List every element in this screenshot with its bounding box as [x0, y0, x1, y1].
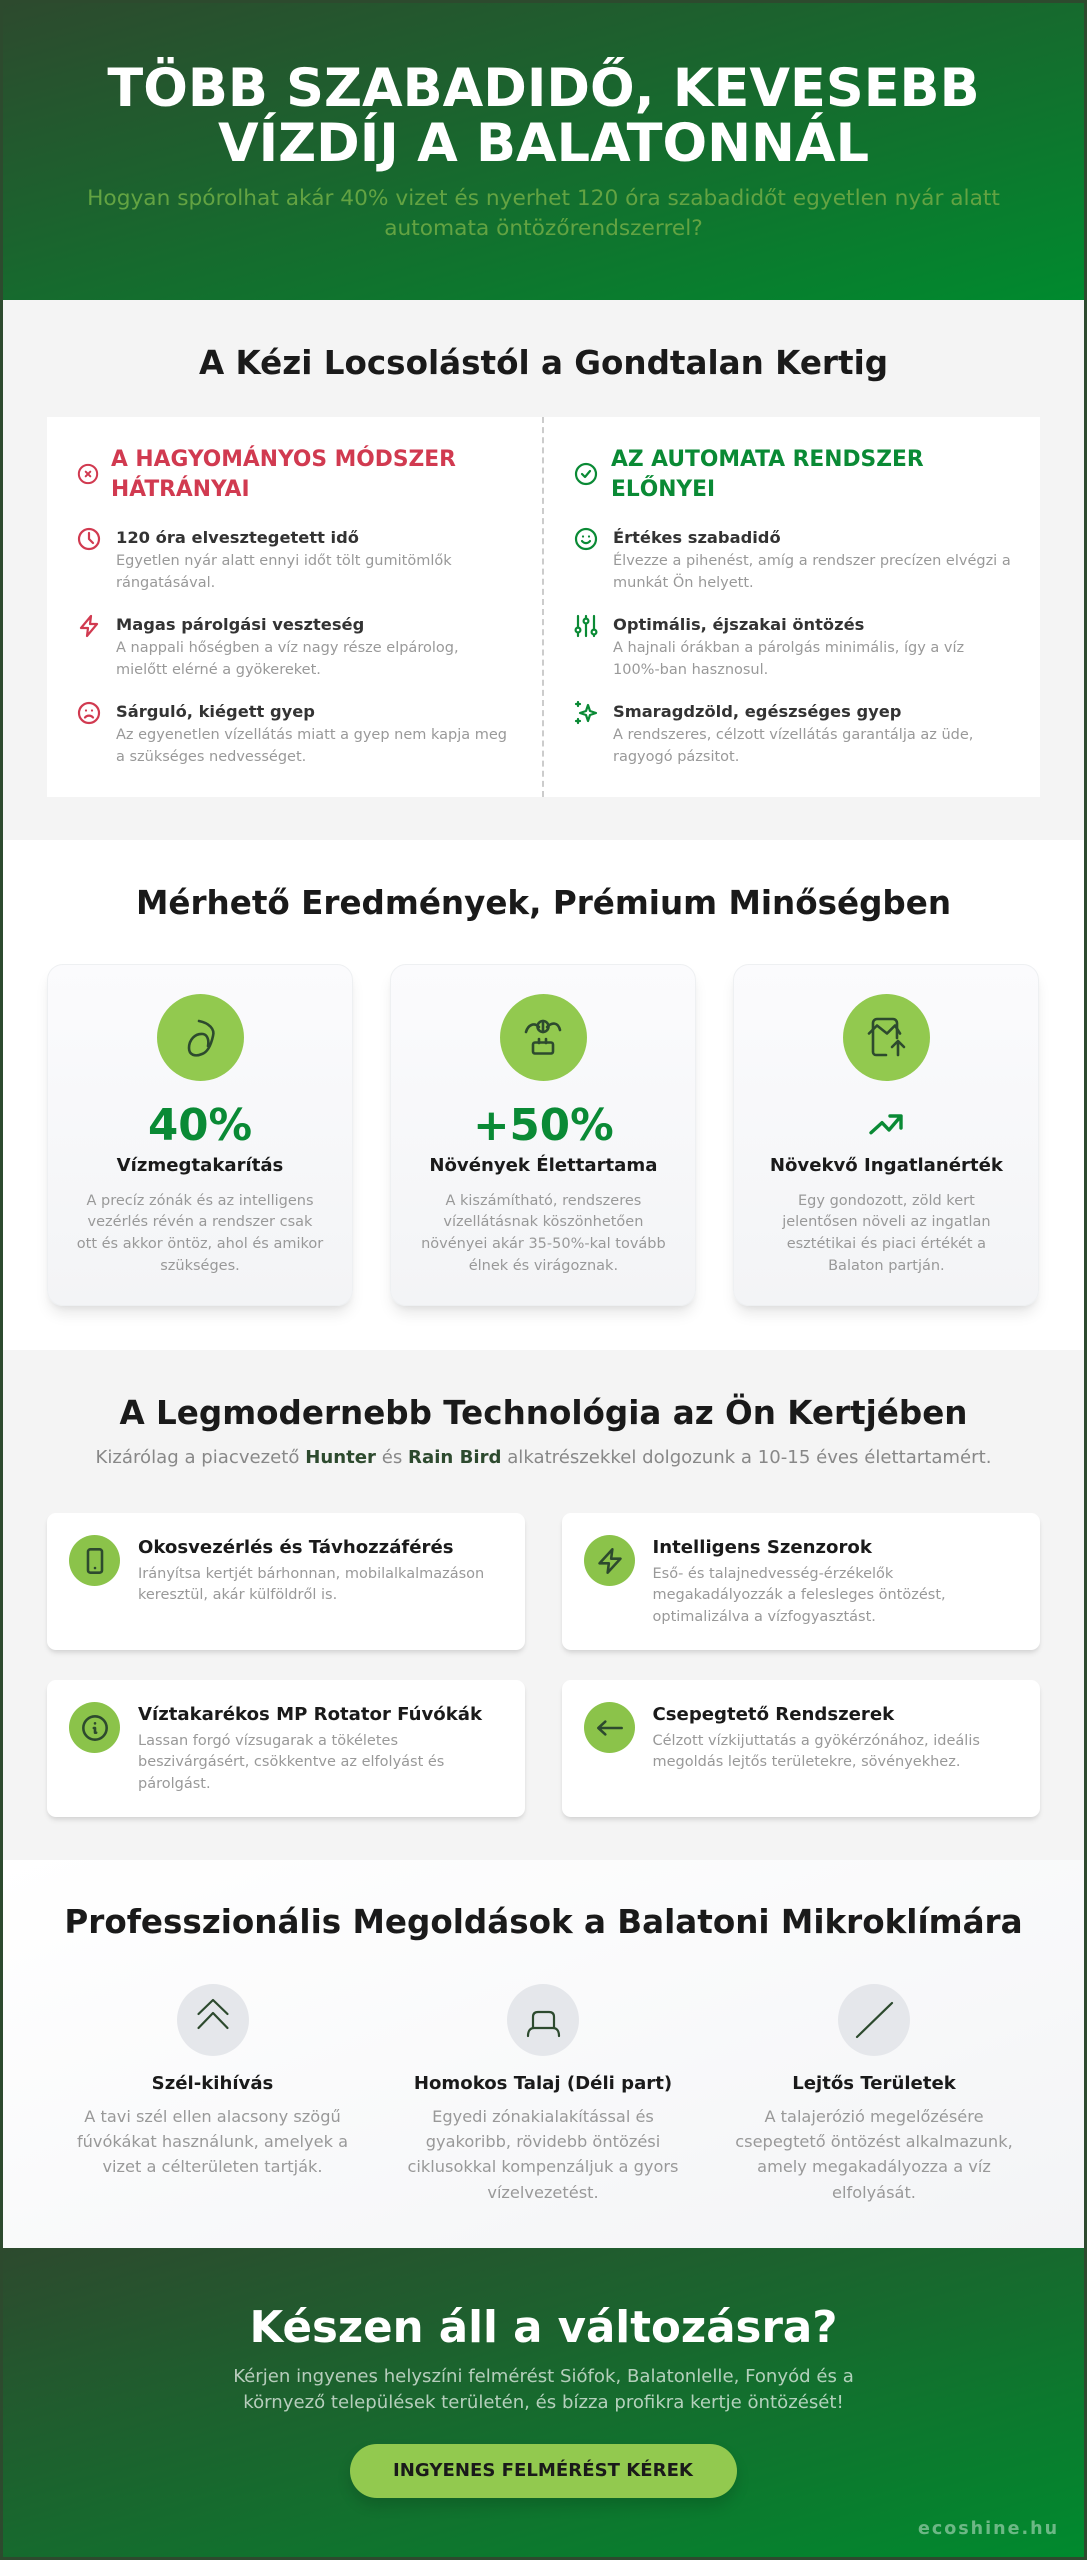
- column text: A talajerózió megelőzésére: [764, 2107, 984, 2126]
- heading: benefits: ELŐNYEI: [611, 476, 715, 502]
- section: local solutions: [3, 1860, 1084, 2248]
- item text: [613, 552, 1011, 591]
- intro text: Kizárólag a piacvezető Hunter és Rain Bird alkatrészekkel dolgozunk a 10-15 éves élettartamért.: [96, 1446, 991, 1468]
- divider: [542, 417, 544, 797]
- item title: Sárguló, kiégett gyep: [116, 702, 315, 721]
- card title: Vízmegtakarítás: [117, 1155, 283, 1176]
- column text: gyakoribb, rövidebb öntözési: [426, 2132, 660, 2151]
- column text: amely megakadályozza a víz: [757, 2157, 991, 2176]
- column title: Lejtős Területek: [792, 2072, 956, 2094]
- card text: megoldás lejtős területekre, sövényekhez.: [652, 1754, 960, 1770]
- card title: Víztakarékos MP Rotator Fúvókák: [138, 1704, 482, 1725]
- column title: Homokos Talaj (Déli part): [414, 2072, 672, 2094]
- icon: x circle: [78, 464, 98, 484]
- card title: Okosvezérlés és Távhozzáférés: [138, 1537, 454, 1558]
- card text: vízellátásnak köszönhetően: [443, 1214, 643, 1230]
- item: yellow lawn: [78, 702, 507, 765]
- card text: A precíz zónák és az intelligens: [86, 1192, 314, 1208]
- button: [350, 2444, 736, 2498]
- card title: Csepegtető Rendszerek: [652, 1704, 894, 1725]
- card text: vezérlés révén a rendszer csak: [88, 1214, 312, 1230]
- heading: drawbacks: [111, 445, 456, 502]
- item text: [613, 640, 964, 678]
- card text: Eső- és talajnedvesség-érzékelők: [652, 1566, 893, 1582]
- card: smart control: [47, 1513, 525, 1650]
- icon circle: phone: [69, 1535, 120, 1586]
- section: comparison: [3, 300, 1084, 840]
- column: slopes: [735, 1984, 1013, 2202]
- card: drip systems: [562, 1680, 1040, 1817]
- icon circle: info: [69, 1702, 120, 1753]
- item text: [613, 727, 973, 765]
- card text: optimalizálva a vízfogyasztást.: [652, 1609, 876, 1625]
- section: results: [3, 840, 1084, 1350]
- section: call to action: [3, 2248, 1084, 2557]
- card text: [652, 1566, 946, 1625]
- brand mark: ecoshine.hu: [918, 2519, 1059, 2539]
- card text: [77, 1192, 324, 1274]
- button: INGYENES FELMÉRÉST KÉREK: [393, 2460, 693, 2481]
- column text: csepegtető öntözést alkalmazunk,: [735, 2132, 1013, 2151]
- item: evaporation: [80, 614, 459, 678]
- card: water saving: [47, 964, 353, 1306]
- item title: Értékes szabadidő: [613, 528, 781, 547]
- heading: benefits: AZ AUTOMATA RENDSZER: [611, 447, 924, 472]
- card text: megakadályozzák a felesleges öntözést,: [652, 1587, 946, 1603]
- card: property value: [733, 964, 1039, 1306]
- icon: sparkles: [574, 701, 598, 724]
- item text: A nappali hőségben a víz nagy része elpárolog,: [116, 640, 459, 656]
- card title: Növekvő Ingatlanérték: [770, 1155, 1003, 1176]
- item: healthy lawn: [574, 701, 973, 765]
- icon circle: slope line: [838, 1984, 910, 2056]
- column text: [77, 2107, 348, 2176]
- icon: bolt: [80, 614, 98, 638]
- card text: [138, 1566, 484, 1603]
- title: TÖBB SZABADIDŐ, KEVESEBB: [107, 58, 980, 119]
- card text: keresztül, akár külföldről is.: [138, 1587, 337, 1603]
- subtitle: [87, 186, 1000, 240]
- card text: beszivárgásért, csökkentve az elfolyást és: [138, 1754, 444, 1770]
- item text: rángatásával.: [116, 575, 215, 591]
- column text: A tavi szél ellen alacsony szögű: [84, 2107, 341, 2126]
- card text: Célzott vízkijuttatás a gyökérzónához, ideális: [652, 1732, 980, 1748]
- icon circle: chevrons: [176, 1984, 248, 2056]
- column: wind: [77, 1984, 348, 2176]
- item text: A rendszeres, célzott vízellátás garantálja az üde,: [613, 727, 973, 743]
- title: VÍZDÍJ A BALATONNÁL: [218, 113, 869, 174]
- column text: elfolyását.: [832, 2183, 916, 2202]
- heading: comparison: A Kézi Locsolástól a Gondtalan Kertig: [199, 344, 888, 382]
- card title: Intelligens Szenzorok: [652, 1537, 872, 1558]
- heading: benefits: [611, 447, 924, 502]
- column title: Szél-kihívás: [152, 2072, 273, 2094]
- item text: [116, 727, 507, 765]
- cta text: környező települések területén, és bízza profikra kertje öntözését!: [243, 2392, 844, 2413]
- column text: [408, 2107, 678, 2202]
- heading: call to action: Készen áll a változásra?: [250, 2303, 838, 2353]
- card text: jelentősen növeli az ingatlan: [782, 1214, 991, 1230]
- heading: local solutions: Professzionális Megoldások a Balatoni Mikroklímára: [64, 1903, 1023, 1941]
- card: rotator nozzles: [47, 1680, 525, 1817]
- column text: ciklusokkal kompenzáljuk a gyors: [408, 2157, 678, 2176]
- column text: fúvókákat használunk, amelyek a: [77, 2132, 348, 2151]
- heading: results: Mérhető Eredmények, Prémium Minőségben: [136, 884, 951, 922]
- item text: Egyetlen nyár alatt ennyi időt tölt gumitömlők: [116, 553, 452, 569]
- card text: esztétikai és piaci értékét a: [787, 1236, 986, 1252]
- card text: Balaton partján.: [828, 1258, 945, 1274]
- column text: [735, 2107, 1013, 2202]
- icon: check circle: [574, 462, 598, 486]
- icon circle: bolt: [584, 1535, 635, 1586]
- card text: [421, 1192, 666, 1274]
- title: [107, 57, 980, 174]
- item title: 120 óra elvesztegetett idő: [116, 528, 359, 547]
- item text: a szükséges nedvességet.: [116, 749, 306, 765]
- stat: 40%: [148, 1101, 252, 1151]
- icon circle: phone with arrow: [843, 994, 930, 1081]
- card text: élnek és virágoznak.: [469, 1258, 618, 1274]
- icon: sliders: [574, 614, 598, 638]
- cta text: Kérjen ingyenes helyszíni felmérést Siófok, Balatonlelle, Fonyód és a: [233, 2366, 854, 2387]
- icon circle: arch: [507, 1984, 579, 2056]
- item text: Élvezze a pihenést, amíg a rendszer precízen elvégzi a: [613, 553, 1011, 569]
- card: sensors: [562, 1513, 1040, 1650]
- card text: szükséges.: [160, 1258, 240, 1274]
- header panel: [3, 3, 1084, 300]
- card text: A kiszámítható, rendszeres: [445, 1192, 641, 1208]
- card text: Irányítsa kertjét bárhonnan, mobilalkalmazáson: [138, 1566, 484, 1582]
- subtitle: Hogyan spórolhat akár 40% vizet és nyerhet 120 óra szabadidőt egyetlen nyár alatt: [87, 186, 1000, 211]
- icon circle: arrow left: [584, 1702, 635, 1753]
- panel: comparison columns: [47, 417, 1040, 797]
- card text: [652, 1732, 980, 1770]
- card text: növényei akár 35-50%-kal tovább: [421, 1236, 666, 1252]
- icon: sad face: [78, 702, 100, 724]
- icon circle: leaf: [156, 994, 244, 1081]
- item text: Az egyenetlen vízellátás miatt a gyep nem kapja meg: [116, 727, 507, 743]
- cta text: [233, 2366, 854, 2413]
- item: free time: [574, 528, 1011, 591]
- column text: Egyedi zónakialakítással és: [432, 2107, 654, 2126]
- item text: [116, 640, 459, 678]
- card title: Növények Élettartama: [429, 1155, 657, 1176]
- item title: Magas párolgási veszteség: [116, 615, 364, 634]
- card text: [138, 1732, 444, 1792]
- item: night irrigation: [574, 614, 964, 678]
- section: technology: [3, 1350, 1084, 1860]
- item text: mielőtt elérné a gyökereket.: [116, 662, 321, 678]
- column: sandy soil: [408, 1984, 678, 2202]
- card text: párolgást.: [138, 1776, 211, 1792]
- column text: vizet a célterületen tartják.: [102, 2157, 323, 2176]
- item text: [116, 553, 452, 591]
- item text: 100%-ban hasznosul.: [613, 662, 768, 678]
- item title: Optimális, éjszakai öntözés: [613, 615, 864, 634]
- card text: ott és akkor öntöz, ahol és amikor: [77, 1236, 323, 1252]
- item: lost time: [78, 528, 452, 591]
- item title: Smaragdzöld, egészséges gyep: [613, 702, 901, 721]
- heading: technology: A Legmodernebb Technológia az Ön Kertjében: [119, 1394, 968, 1432]
- icon: trending up: [869, 1114, 903, 1134]
- item text: munkát Ön helyett.: [613, 575, 754, 591]
- icon circle: plant box: [500, 994, 587, 1081]
- icon: clock: [78, 528, 100, 550]
- card text: Egy gondozott, zöld kert: [798, 1192, 975, 1208]
- card text: [782, 1192, 991, 1274]
- icon: smile: [574, 528, 598, 550]
- heading: drawbacks: HÁTRÁNYAI: [111, 476, 250, 502]
- card: plant lifespan: [390, 964, 696, 1306]
- item text: A hajnali órákban a párolgás minimális, így a víz: [613, 640, 964, 656]
- subtitle: automata öntözőrendszerrel?: [384, 216, 703, 240]
- column text: vízelvezetést.: [487, 2183, 599, 2202]
- card text: Lassan forgó vízsugarak a tökéletes: [138, 1732, 398, 1748]
- heading: drawbacks: A HAGYOMÁNYOS MÓDSZER: [111, 447, 456, 472]
- item text: ragyogó pázsitot.: [613, 749, 739, 765]
- stat: +50%: [473, 1101, 614, 1151]
